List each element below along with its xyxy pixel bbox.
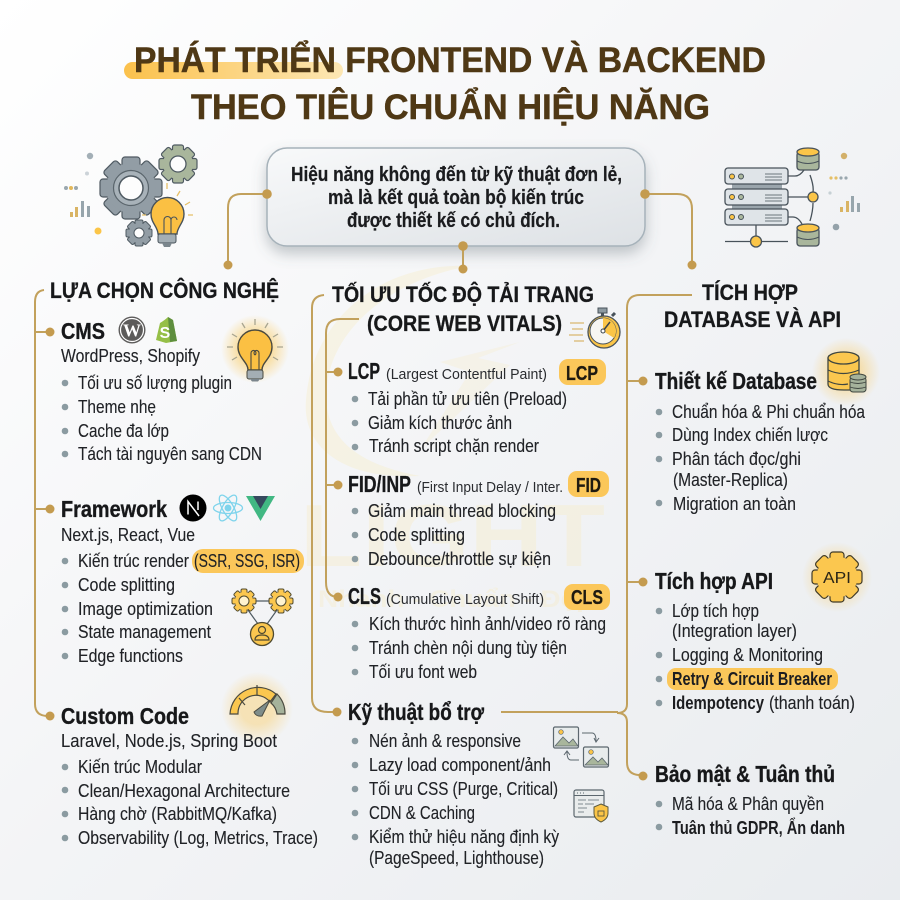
icon: database xyxy=(812,338,880,406)
block: supporting techniques: Lazy load component/ảnh xyxy=(369,755,551,775)
block: CMS: Tối ưu số lượng plugin xyxy=(78,373,232,393)
title xyxy=(124,40,766,127)
heading: database and API: DATABASE VÀ API xyxy=(664,307,841,332)
icon: WordPress logo xyxy=(118,316,146,344)
icon: servers and databases xyxy=(725,148,860,247)
panel: page speed xyxy=(312,281,620,868)
block: Custom Code: Laravel, Node.js, Spring Boot xyxy=(61,731,277,751)
watermark: Nhanh - Chuẩn - Đẹp xyxy=(318,586,593,613)
heading: database and API xyxy=(664,280,841,332)
badge: FID xyxy=(568,471,609,497)
block: CLS: Tránh chèn nội dung tùy tiện xyxy=(369,638,567,658)
block: Custom Code: Hàng chờ (RabbitMQ/Kafka) xyxy=(78,804,277,824)
panel: technology choices xyxy=(35,278,318,848)
block: database design: (Master-Replica) xyxy=(673,470,788,490)
badge: CLS: CLS xyxy=(571,587,603,609)
icon: Shopify logo xyxy=(156,317,177,343)
block: Custom Code xyxy=(46,703,318,848)
block: API integration xyxy=(627,568,855,713)
block: FID/INP: Code splitting xyxy=(368,525,465,545)
watermark: LIGHT xyxy=(300,486,605,585)
heading: technology choices: LỰA CHỌN CÔNG NGHỆ xyxy=(50,278,279,303)
icon: light bulb xyxy=(221,315,289,383)
icon: browser security xyxy=(574,790,608,822)
block: Framework: Next.js, React, Vue xyxy=(61,525,195,545)
icon: WordPress logo: W xyxy=(123,320,141,340)
block: CMS xyxy=(35,318,262,464)
block: LCP: (Largest Contentful Paint) xyxy=(386,366,547,383)
block: database design: Migration an toàn xyxy=(673,494,796,514)
block: CMS: Tách tài nguyên sang CDN xyxy=(78,444,262,464)
block: Framework: Edge functions xyxy=(78,646,183,666)
block: supporting techniques: CDN & Caching xyxy=(369,803,475,823)
highlight: retry and circuit breaker: Retry & Circuit Breaker xyxy=(672,669,832,689)
block: API integration: Idempotency xyxy=(672,693,764,713)
block: supporting techniques: Kỹ thuật bổ trợ xyxy=(348,699,485,725)
block: FID/INP: (First Input Delay / Inter. xyxy=(417,479,563,496)
highlight: SSR SSG ISR: (SSR, SSG, ISR) xyxy=(194,551,300,571)
block: CLS: Tối ưu font web xyxy=(369,662,477,682)
block: CMS: Cache đa lớp xyxy=(78,421,169,441)
block: database design: Thiết kế Database xyxy=(655,368,817,394)
block: supporting techniques: Tối ưu CSS (Purge, Critical) xyxy=(369,779,558,799)
block: API integration: (Integration layer) xyxy=(672,621,797,641)
block: Custom Code: Observability (Log, Metrics, Trace) xyxy=(78,828,318,848)
icon: API gear: API xyxy=(823,570,851,587)
block: CLS: CLS xyxy=(348,583,381,609)
icon: responsive images xyxy=(554,727,608,767)
block: CLS xyxy=(334,583,610,682)
block: FID/INP: Debounce/throttle sự kiện xyxy=(368,549,551,569)
block: API integration: Lớp tích hợp xyxy=(672,601,759,621)
connector: callout to middle column xyxy=(458,241,468,274)
icon: Next.js logo xyxy=(180,494,206,522)
block: security and compliance: Mã hóa & Phân quyền xyxy=(672,794,824,814)
badge: LCP: LCP xyxy=(566,363,598,385)
icon: Shopify logo: S xyxy=(160,325,171,342)
block: FID/INP xyxy=(326,471,609,569)
block: LCP xyxy=(326,358,606,456)
block: LCP: Tránh script chặn render xyxy=(369,436,539,456)
heading: page speed xyxy=(332,281,594,336)
watermark xyxy=(300,266,605,613)
block: API integration: (thanh toán) xyxy=(769,693,855,713)
block: CMS: CMS xyxy=(61,318,105,344)
block: API integration: Tích hợp API xyxy=(655,568,773,594)
block: supporting techniques xyxy=(332,699,618,868)
block: Custom Code: Clean/Hexagonal Architecture xyxy=(78,781,290,801)
callout: key message: Hiệu năng không đến từ kỹ thuật đơn lẻ, xyxy=(291,163,622,186)
connector: callout to left column xyxy=(224,189,272,270)
callout: key message xyxy=(267,148,645,246)
block: supporting techniques: Kiểm thử hiệu năng định kỳ xyxy=(369,827,559,847)
block: database design xyxy=(627,368,866,514)
block: database design: Phân tách đọc/ghi xyxy=(672,449,801,469)
icon: API gear xyxy=(802,542,872,612)
block: LCP: Giảm kích thước ảnh xyxy=(368,413,512,433)
block: Custom Code: Kiến trúc Modular xyxy=(78,757,202,777)
heading: page speed: TỐI ƯU TỐC ĐỘ TẢI TRANG xyxy=(332,281,594,307)
block: API integration: Logging & Monitoring xyxy=(672,645,823,665)
block: security and compliance: Tuân thủ GDPR, Ẩn danh xyxy=(672,817,845,838)
block: security and compliance xyxy=(617,713,845,838)
block: database design: Chuẩn hóa & Phi chuẩn hóa xyxy=(672,402,866,422)
heading: page speed: (CORE WEB VITALS) xyxy=(367,311,562,336)
block: LCP: LCP xyxy=(348,358,380,384)
block: Framework: Kiến trúc render xyxy=(78,551,189,571)
callout: key message: được thiết kế có chủ đích. xyxy=(347,209,560,232)
block: supporting techniques: (PageSpeed, Lighthouse) xyxy=(369,848,544,868)
block: Custom Code: Custom Code xyxy=(61,703,189,729)
block: CMS: Theme nhẹ xyxy=(78,397,156,417)
block: Framework: Image optimization xyxy=(78,599,213,619)
block: CMS: WordPress, Shopify xyxy=(61,346,200,366)
block: supporting techniques: Nén ảnh & responsive xyxy=(369,731,521,751)
icon: Vue logo xyxy=(246,496,275,521)
block: CLS: Kích thước hình ảnh/video rõ ràng xyxy=(369,614,606,634)
title: THEO TIÊU CHUẨN HIỆU NĂNG xyxy=(191,87,710,127)
block: FID/INP: Giảm main thread blocking xyxy=(368,501,556,521)
block: Framework xyxy=(35,496,304,666)
block: Framework: Code splitting xyxy=(78,575,175,595)
icon: speed gauge xyxy=(221,672,293,744)
icon: gears and bulb xyxy=(64,145,197,247)
icon: stopwatch xyxy=(569,308,620,348)
block: Framework: State management xyxy=(78,622,211,642)
block: FID/INP: FID/INP xyxy=(348,471,411,497)
block: LCP: Tải phần tử ưu tiên (Preload) xyxy=(368,389,567,409)
block: Framework: Framework xyxy=(61,496,167,522)
icon: React logo xyxy=(214,493,242,523)
connector: callout to right column xyxy=(640,189,696,270)
title: PHÁT TRIỂN FRONTEND VÀ BACKEND xyxy=(134,40,766,80)
callout: key message: mà là kết quả toàn bộ kiến trúc xyxy=(328,186,584,209)
icon: gear network xyxy=(232,589,293,646)
badge: FID: FID xyxy=(576,475,601,497)
heading: database and API: TÍCH HỢP xyxy=(702,280,798,305)
panel: database and API xyxy=(617,280,880,838)
highlight: SSR SSG ISR xyxy=(192,549,304,573)
block: database design: Dùng Index chiến lược xyxy=(672,425,828,445)
block: security and compliance: Bảo mật & Tuân thủ xyxy=(655,761,835,787)
block: CLS: (Cumulative Layout Shift) xyxy=(386,591,544,608)
